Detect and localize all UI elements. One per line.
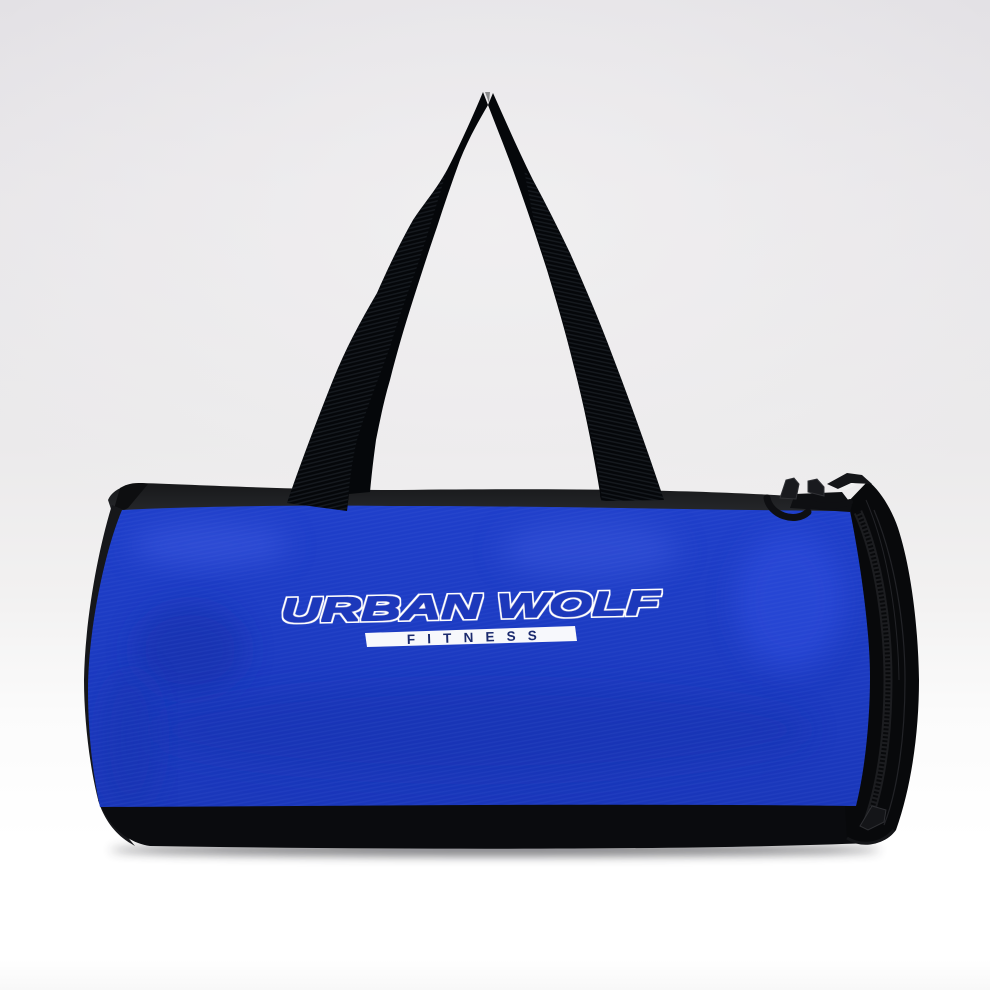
blue front panel: [80, 500, 880, 810]
URBAN WOLF text: URBAN WOLF: [280, 584, 661, 629]
FITNESS text: FITNESS: [407, 628, 537, 647]
logo wordmark: [280, 584, 661, 647]
right handle strap: [488, 93, 664, 501]
zipper tape: [858, 512, 888, 826]
zipper tab two: [808, 479, 824, 496]
lower zipper pull: [860, 806, 886, 830]
left handle strap: [287, 92, 488, 511]
FITNESS label bar: [365, 626, 577, 647]
rear left seam: [112, 483, 148, 516]
left bag edge: [84, 505, 135, 846]
handle joint tip: [485, 92, 490, 103]
zipper ring two: [804, 497, 850, 506]
zipper tab one: [780, 478, 799, 499]
ground shadow: [110, 844, 880, 856]
right end cap with zipper: [845, 481, 919, 844]
bottom black panel: [98, 800, 870, 849]
gap highlight in strap: [838, 483, 858, 490]
zipper ring one: [767, 498, 808, 517]
bag top panel: [108, 483, 850, 530]
top zipper pulls and strap: [767, 473, 872, 517]
end strap: [827, 473, 872, 489]
